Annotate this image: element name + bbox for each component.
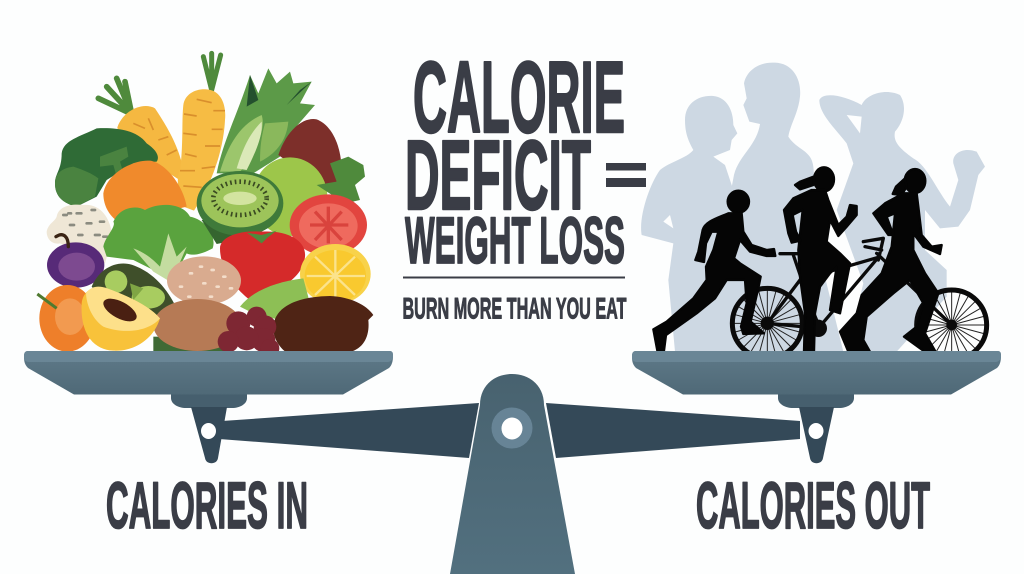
heading: Calorie Deficit = Weight Loss: DEFICIT — [405, 120, 591, 230]
icon: bicycle — [732, 238, 987, 360]
background silhouette: right woman with raised arm — [819, 92, 985, 352]
central post — [450, 374, 575, 574]
icon: cauliflower — [47, 205, 113, 263]
icon: left carrot — [98, 78, 185, 183]
heading: Calorie Deficit = Weight Loss — [405, 42, 646, 277]
balance scale — [24, 351, 1001, 574]
icon: grapes — [218, 306, 280, 351]
icon: plum — [47, 235, 104, 288]
icon: green apple — [253, 157, 327, 236]
background silhouette: centre man — [732, 62, 844, 351]
scale beam — [219, 403, 800, 458]
icon: lettuce — [240, 278, 310, 320]
illustration: exercising silhouettes — [641, 63, 987, 360]
text: CALORIES IN — [106, 468, 308, 542]
left pan collar — [171, 394, 247, 408]
subheading: BURN MORE THAN YOU EAT — [402, 292, 626, 326]
silhouette: right runner — [840, 169, 942, 352]
heading: Calorie Deficit = Weight Loss: WEIGHT LOSS — [405, 203, 625, 277]
heading: Calorie Deficit = Weight Loss: CALORIE — [413, 42, 625, 154]
right pan — [632, 351, 1001, 463]
divider line — [403, 276, 625, 278]
silhouette: centre runner on bike — [784, 167, 857, 352]
silhouette: left runner — [653, 191, 775, 351]
right pan body — [632, 351, 1001, 394]
icon: brown potato — [153, 299, 241, 351]
equals sign — [606, 163, 646, 187]
left pan — [24, 351, 393, 463]
central pivot — [492, 408, 532, 448]
icon: lemon slice — [300, 244, 371, 304]
right pivot hole — [808, 423, 824, 439]
icon: dark red pepper — [278, 119, 342, 187]
icon: halved tomato — [290, 157, 367, 256]
rear wheel — [732, 288, 802, 358]
icon: orange squash — [103, 161, 187, 223]
left pivot hole — [201, 423, 216, 439]
icon: avocado with sprouts — [92, 264, 174, 315]
icon: green broccoli — [103, 205, 214, 282]
base foliage — [153, 336, 224, 351]
front wheel — [917, 290, 987, 360]
right pan rim — [632, 351, 1001, 362]
illustration: pile of fruit and vegetables — [37, 53, 373, 358]
right pan collar — [778, 394, 854, 408]
right hanger — [799, 407, 834, 463]
icon: leafy greens — [217, 68, 315, 173]
icon: halved peach — [82, 287, 160, 351]
icon: speckled potato — [167, 256, 241, 305]
icon: halved kiwi — [197, 171, 283, 244]
icon: orange — [37, 285, 95, 352]
frame — [767, 238, 952, 328]
icon: dark broccoli — [55, 128, 158, 207]
left hanger — [191, 407, 227, 463]
icon: red tomato — [220, 231, 305, 300]
icon: dark brown fruit — [273, 296, 373, 353]
background silhouette: left man — [641, 96, 743, 352]
left pan body — [24, 351, 393, 394]
left pan rim — [24, 351, 393, 362]
icon: centre carrot — [178, 53, 225, 211]
